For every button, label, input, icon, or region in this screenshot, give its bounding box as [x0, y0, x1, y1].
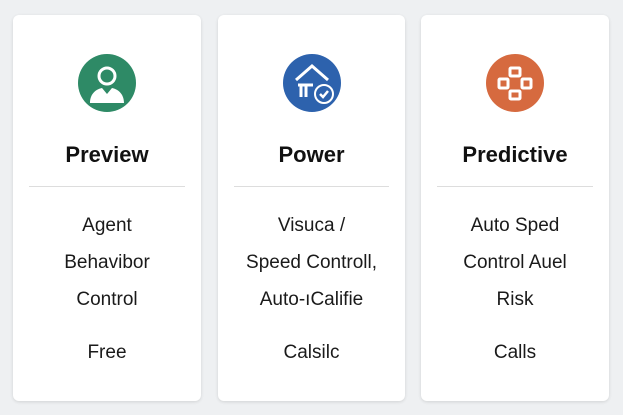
title: Predictive: [462, 142, 568, 167]
text: features: Behavibor: [64, 252, 150, 273]
text: features: Agent: [82, 215, 132, 236]
text: price: Calls: [494, 342, 536, 363]
text: price: Calsilc: [284, 342, 339, 363]
icon: nodes: [486, 54, 544, 112]
text: price: Free: [87, 342, 127, 363]
text: features: [463, 215, 567, 310]
text: features: Auto Sped: [471, 215, 559, 236]
panel: preview: [13, 15, 201, 401]
title: Preview: [65, 142, 149, 167]
text: features: Visuca /: [278, 215, 345, 236]
panel: power: [218, 15, 405, 401]
text: features: Control: [76, 289, 138, 310]
text: features: Control Auel: [463, 252, 567, 273]
title: Power: [278, 142, 345, 167]
icon: person: [78, 54, 136, 112]
panel: predictive: [421, 15, 609, 401]
text: features: Speed Controll,: [246, 252, 377, 273]
icon: house check: [283, 54, 341, 112]
text: features: [64, 215, 150, 310]
text: features: Auto-ıCalifie: [260, 289, 363, 310]
text: features: Risk: [497, 289, 533, 310]
text: features: [246, 215, 377, 310]
